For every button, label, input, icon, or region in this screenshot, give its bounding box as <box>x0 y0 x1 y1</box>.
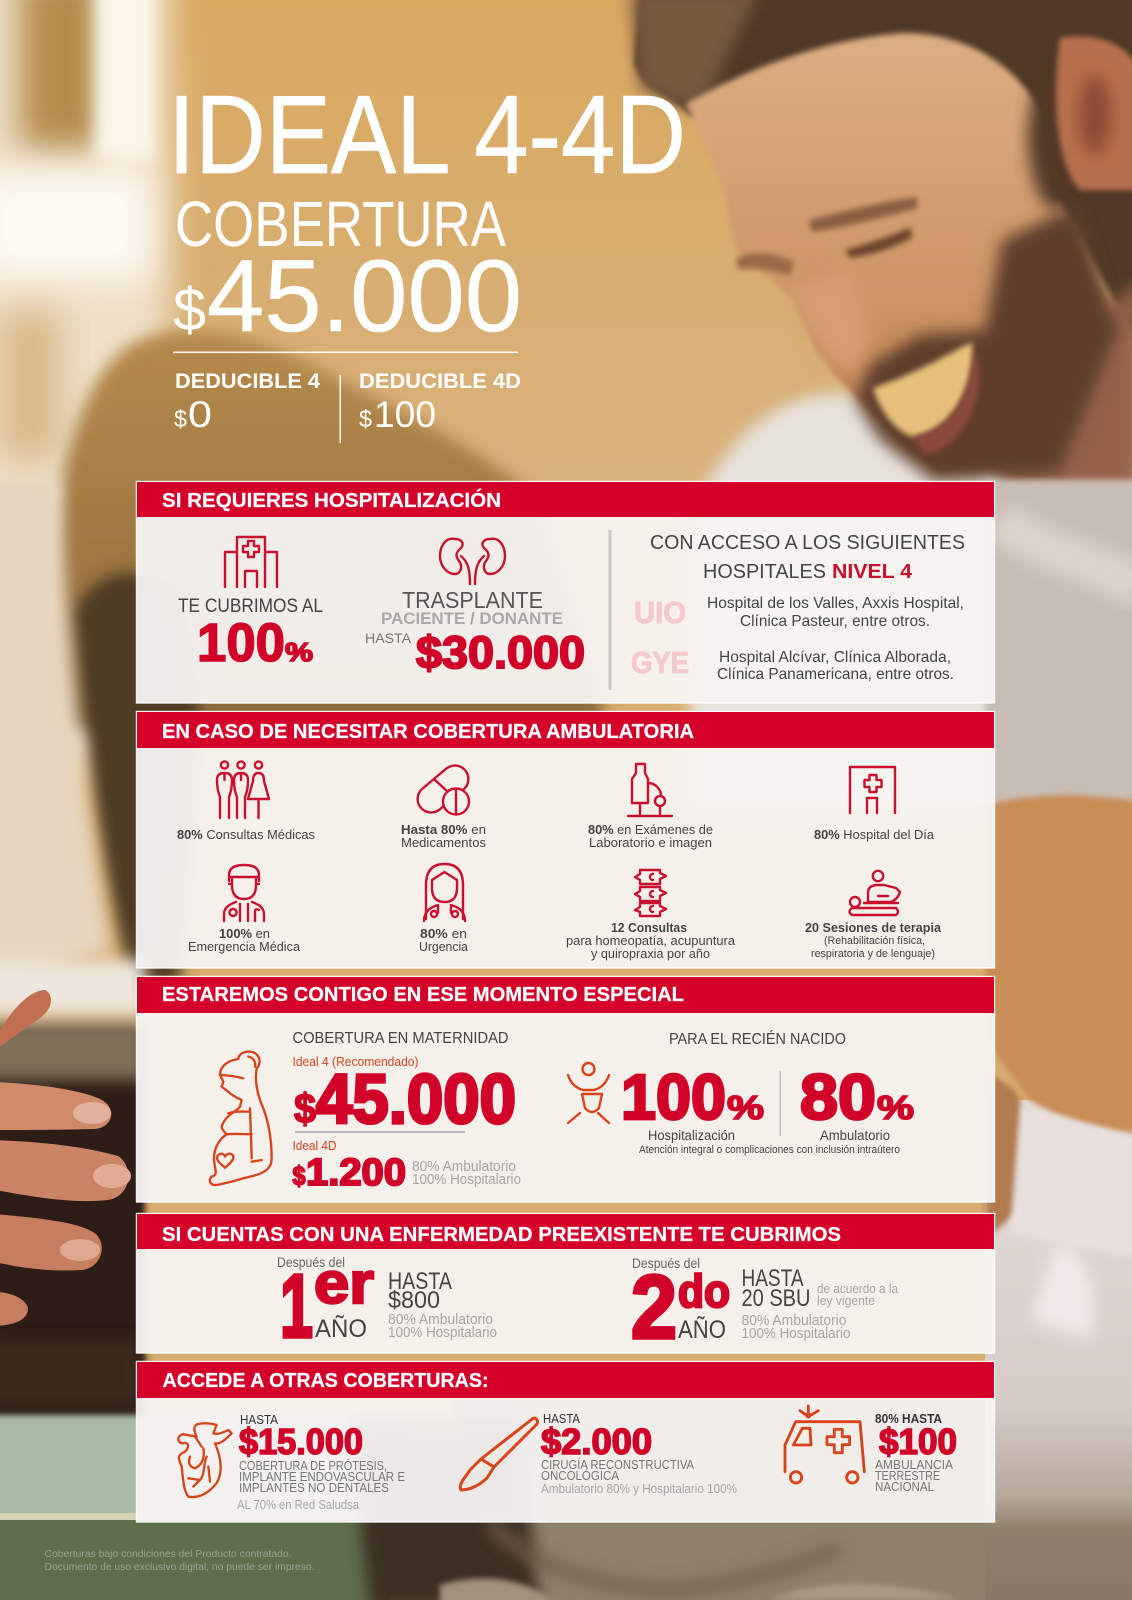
block: reconstructive surgery: ONCOLÓGICA <box>541 1468 619 1483</box>
text: GYE hospitals <box>717 649 954 683</box>
text: urgencia <box>419 926 469 954</box>
block: second year: 2 <box>631 1258 677 1358</box>
panel: ambulatory coverage <box>136 712 994 968</box>
figure: maternity 45.000: $ <box>294 1085 316 1132</box>
text: UIO hospitals: Clínica Pasteur, entre otros. <box>740 613 930 630</box>
block: second year: HASTA <box>742 1265 804 1292</box>
text: maternity percentages <box>412 1159 521 1188</box>
icon: kidneys <box>440 539 505 584</box>
icon: pills <box>412 760 474 818</box>
amount: coverage 45.000: 45.000 <box>207 239 522 353</box>
vertical divider <box>780 1071 781 1136</box>
block: reconstructive surgery <box>541 1412 737 1496</box>
block: second year: de acuerdo a la <box>817 1281 899 1296</box>
text: 20 sesiones: 20 Sesiones de terapia <box>805 920 942 935</box>
deductible 4: $ <box>174 406 187 433</box>
label: ideal 4: Ideal 4 (Recomendado) <box>292 1054 418 1069</box>
block: reconstructive surgery: Ambulatorio 80% y Hospitalario 100% <box>541 1482 737 1496</box>
block: prosthesis coverage: IMPLANTE ENDOVASCULAR E <box>239 1469 405 1484</box>
figure: 100 percent: % <box>285 637 313 667</box>
block: first year: Después del <box>277 1254 345 1270</box>
text: urgencia: Urgencia <box>419 939 469 954</box>
block: first year: 80% Ambulatorio <box>388 1312 493 1328</box>
block: ambulance coverage: AMBULANCIA <box>875 1457 953 1472</box>
heading: hospital access: HOSPITALES <box>703 560 826 583</box>
title: IDEAL 4-4D <box>168 73 686 197</box>
deductible 4D: 100 <box>374 394 436 435</box>
block: first year <box>277 1251 497 1357</box>
figure: 100 percent: 100 <box>197 613 285 673</box>
heading: hospital access: CON ACCESO A LOS SIGUIENTES <box>650 531 965 554</box>
icon: hospital <box>225 537 277 587</box>
block: second year: Después del <box>632 1255 700 1271</box>
figure: 100 percent newborn: 100 <box>621 1061 726 1133</box>
block: prosthesis coverage: HASTA <box>240 1413 279 1427</box>
icon: microscope <box>628 764 672 816</box>
panel header: preexisting <box>137 1214 994 1249</box>
block: ambulance coverage: $100 <box>879 1421 957 1462</box>
text: atencion integral: Atención integral o complicaciones con inclusión intraútero <box>639 1144 900 1156</box>
icon: urgency nurse <box>424 864 465 921</box>
icon: heart <box>178 1423 232 1497</box>
panel header: ambulatory: EN CASO DE NECESITAR COBERTURA AMBULATORIA <box>162 720 694 743</box>
block: prosthesis coverage: COBERTURA DE PRÓTESIS, <box>239 1458 387 1473</box>
block: reconstructive surgery: HASTA <box>543 1412 581 1426</box>
vertical divider <box>608 530 612 690</box>
heading: hospital access: NIVEL 4 <box>832 560 913 583</box>
block: first year: er <box>314 1251 374 1316</box>
panel header: hospitalization <box>137 482 994 517</box>
text: 20 sesiones: respiratoria y de lenguaje) <box>811 948 935 960</box>
text: 12 consultas: 12 Consultas <box>611 920 687 935</box>
text: 20 sesiones: (Rehabilitación física, <box>824 935 925 947</box>
text: maternity percentages: 100% Hospitalario <box>412 1172 521 1188</box>
text: 20 sesiones <box>805 920 942 960</box>
text: te cubrimos al: TE CUBRIMOS AL <box>178 596 323 617</box>
panel header: ambulatory <box>137 712 994 748</box>
heading: cobertura: COBERTURA <box>175 188 506 260</box>
text: medicamentos <box>401 822 486 850</box>
block: reconstructive surgery: CIRUGÍA RECONSTRUCTIVA <box>541 1457 694 1472</box>
deductible 4: DEDUCIBLE 4 <box>175 370 320 393</box>
figure: maternity 1.200: 1.200 <box>306 1152 406 1194</box>
text: paciente / donante: PACIENTE / DONANTE <box>381 610 563 628</box>
text: emergencia medica <box>188 926 301 954</box>
figure: 30.000: $30.000 <box>416 627 585 678</box>
text: laboratorio: 80% en Exámenes de <box>588 822 713 837</box>
footer disclaimer: Coberturas bajo condiciones del Producto contratado. <box>44 1548 292 1560</box>
divider line <box>295 1131 465 1133</box>
icon: medical staff <box>217 761 269 818</box>
deductible 4D <box>359 370 521 435</box>
figure: maternity 45.000: 45.000 <box>316 1060 516 1138</box>
icon: newborn <box>568 1063 609 1123</box>
deductible 4D: DEDUCIBLE 4D <box>359 370 521 393</box>
figure: maternity 1.200: $ <box>292 1161 306 1191</box>
icon: pregnant woman <box>210 1052 272 1185</box>
text: hasta: HASTA <box>365 630 412 646</box>
text: GYE hospitals: Hospital Alcívar, Clínica Alborada, <box>719 649 951 666</box>
block: prosthesis coverage <box>237 1413 405 1512</box>
text: laboratorio <box>588 822 713 850</box>
panel header: maternity <box>137 977 994 1013</box>
panel: other coverages <box>136 1362 994 1522</box>
block: first year: $800 <box>388 1287 440 1314</box>
panel header: other coverages: ACCEDE A OTRAS COBERTURAS: <box>162 1369 488 1392</box>
block: reconstructive surgery: $2.000 <box>541 1421 652 1462</box>
block: prosthesis coverage: IMPLANTES NO DENTALES <box>239 1480 389 1495</box>
divider line <box>173 352 518 353</box>
block: second year: do <box>678 1265 730 1317</box>
figure: 100 percent newborn: % <box>727 1089 764 1126</box>
text: maternity percentages: 80% Ambulatorio <box>412 1159 516 1175</box>
icon: therapy session <box>850 871 900 915</box>
text: UIO hospitals: Hospital de los Valles, Axxis Hospital, <box>707 595 964 612</box>
text: urgencia: 80% en <box>420 926 467 941</box>
icon: scalpel <box>460 1418 537 1490</box>
heading: hospital access <box>650 531 965 583</box>
deductible 4: 0 <box>188 394 212 435</box>
panel: hospitalization <box>136 482 994 703</box>
panel header: other coverages <box>137 1362 994 1398</box>
footer disclaimer <box>44 1548 314 1573</box>
icon: day hospital <box>850 767 895 813</box>
block: first year: HASTA <box>388 1268 452 1295</box>
block: second year: 100% Hospitalario <box>742 1326 850 1342</box>
deductible 4 <box>174 370 320 435</box>
text: emergencia medica: Emergencia Médica <box>188 939 301 954</box>
label: hospitalizacion: Hospitalización <box>648 1127 735 1143</box>
text: cobertura en maternidad: COBERTURA EN MATERNIDAD <box>292 1030 508 1047</box>
block: ambulance coverage <box>875 1412 957 1494</box>
block: first year: 1 <box>280 1257 313 1357</box>
vertical separator <box>340 375 341 443</box>
block: first year: AÑO <box>315 1314 367 1343</box>
text: GYE hospitals: Clínica Panamericana, entre otros. <box>717 666 954 683</box>
figure: 80 percent newborn <box>800 1061 914 1133</box>
block: ambulance coverage: NACIONAL <box>875 1479 934 1494</box>
footer disclaimer: Documento de uso exclusivo digital, no puede ser impreso. <box>44 1561 314 1573</box>
text: emergencia medica: 100% en <box>219 926 270 941</box>
text: medicamentos: Medicamentos <box>401 835 486 850</box>
panel: preexisting conditions <box>136 1214 994 1358</box>
label: GYE: GYE <box>631 645 689 680</box>
block: second year <box>631 1255 899 1358</box>
block: second year: ley vigente <box>817 1293 875 1308</box>
panel header: maternity: ESTAREMOS CONTIGO EN ESE MOMENTO ESPECIAL <box>162 983 684 1006</box>
text: hospital del dia: 80% Hospital del Día <box>814 827 935 842</box>
panel header: hospitalization: SI REQUIERES HOSPITALIZACIÓN <box>162 488 501 512</box>
block: prosthesis coverage: $15.000 <box>239 1421 363 1462</box>
panel: maternity <box>136 976 994 1202</box>
figure: 80 percent newborn: % <box>877 1089 914 1126</box>
text: medicamentos: Hasta 80% en <box>401 822 486 837</box>
text: 12 consultas: y quiropraxia por año <box>591 946 710 961</box>
amount: coverage 45.000: $ <box>173 276 206 343</box>
text: consultas medicas: 80% Consultas Médicas <box>177 827 315 842</box>
label: ideal 4D: Ideal 4D <box>292 1138 336 1153</box>
deductible 4D: $ <box>359 406 372 433</box>
text: UIO hospitals <box>707 595 964 630</box>
icon: emergency doctor <box>224 865 264 921</box>
block: ambulance coverage: 80% HASTA <box>875 1412 942 1426</box>
block: prosthesis coverage: AL 70% en Red Saludsa <box>237 1498 359 1512</box>
block: first year: 100% Hospitalario <box>388 1325 497 1341</box>
text: trasplante: TRASPLANTE <box>402 587 543 613</box>
icon: spine <box>635 870 666 916</box>
block: ambulance coverage: TERRESTRE <box>875 1468 940 1483</box>
block: second year: 20 SBU <box>742 1285 810 1312</box>
label: UIO: UIO <box>634 595 686 630</box>
icon: ambulance <box>785 1406 864 1483</box>
panel header: preexisting: SI CUENTAS CON UNA ENFERMEDAD PREEXISTENTE TE CUBRIMOS <box>162 1223 841 1246</box>
text: para el recien nacido: PARA EL RECIÉN NACIDO <box>669 1029 846 1048</box>
figure: 80 percent newborn: 80 <box>800 1061 876 1133</box>
block: second year: 80% Ambulatorio <box>742 1313 846 1329</box>
text: 12 consultas <box>566 920 736 961</box>
block: second year: AÑO <box>678 1315 726 1344</box>
text: 12 consultas: para homeopatía, acupuntura <box>566 933 736 948</box>
text: laboratorio: Laboratorio e imagen <box>589 835 712 850</box>
label: ambulatorio: Ambulatorio <box>820 1127 890 1143</box>
